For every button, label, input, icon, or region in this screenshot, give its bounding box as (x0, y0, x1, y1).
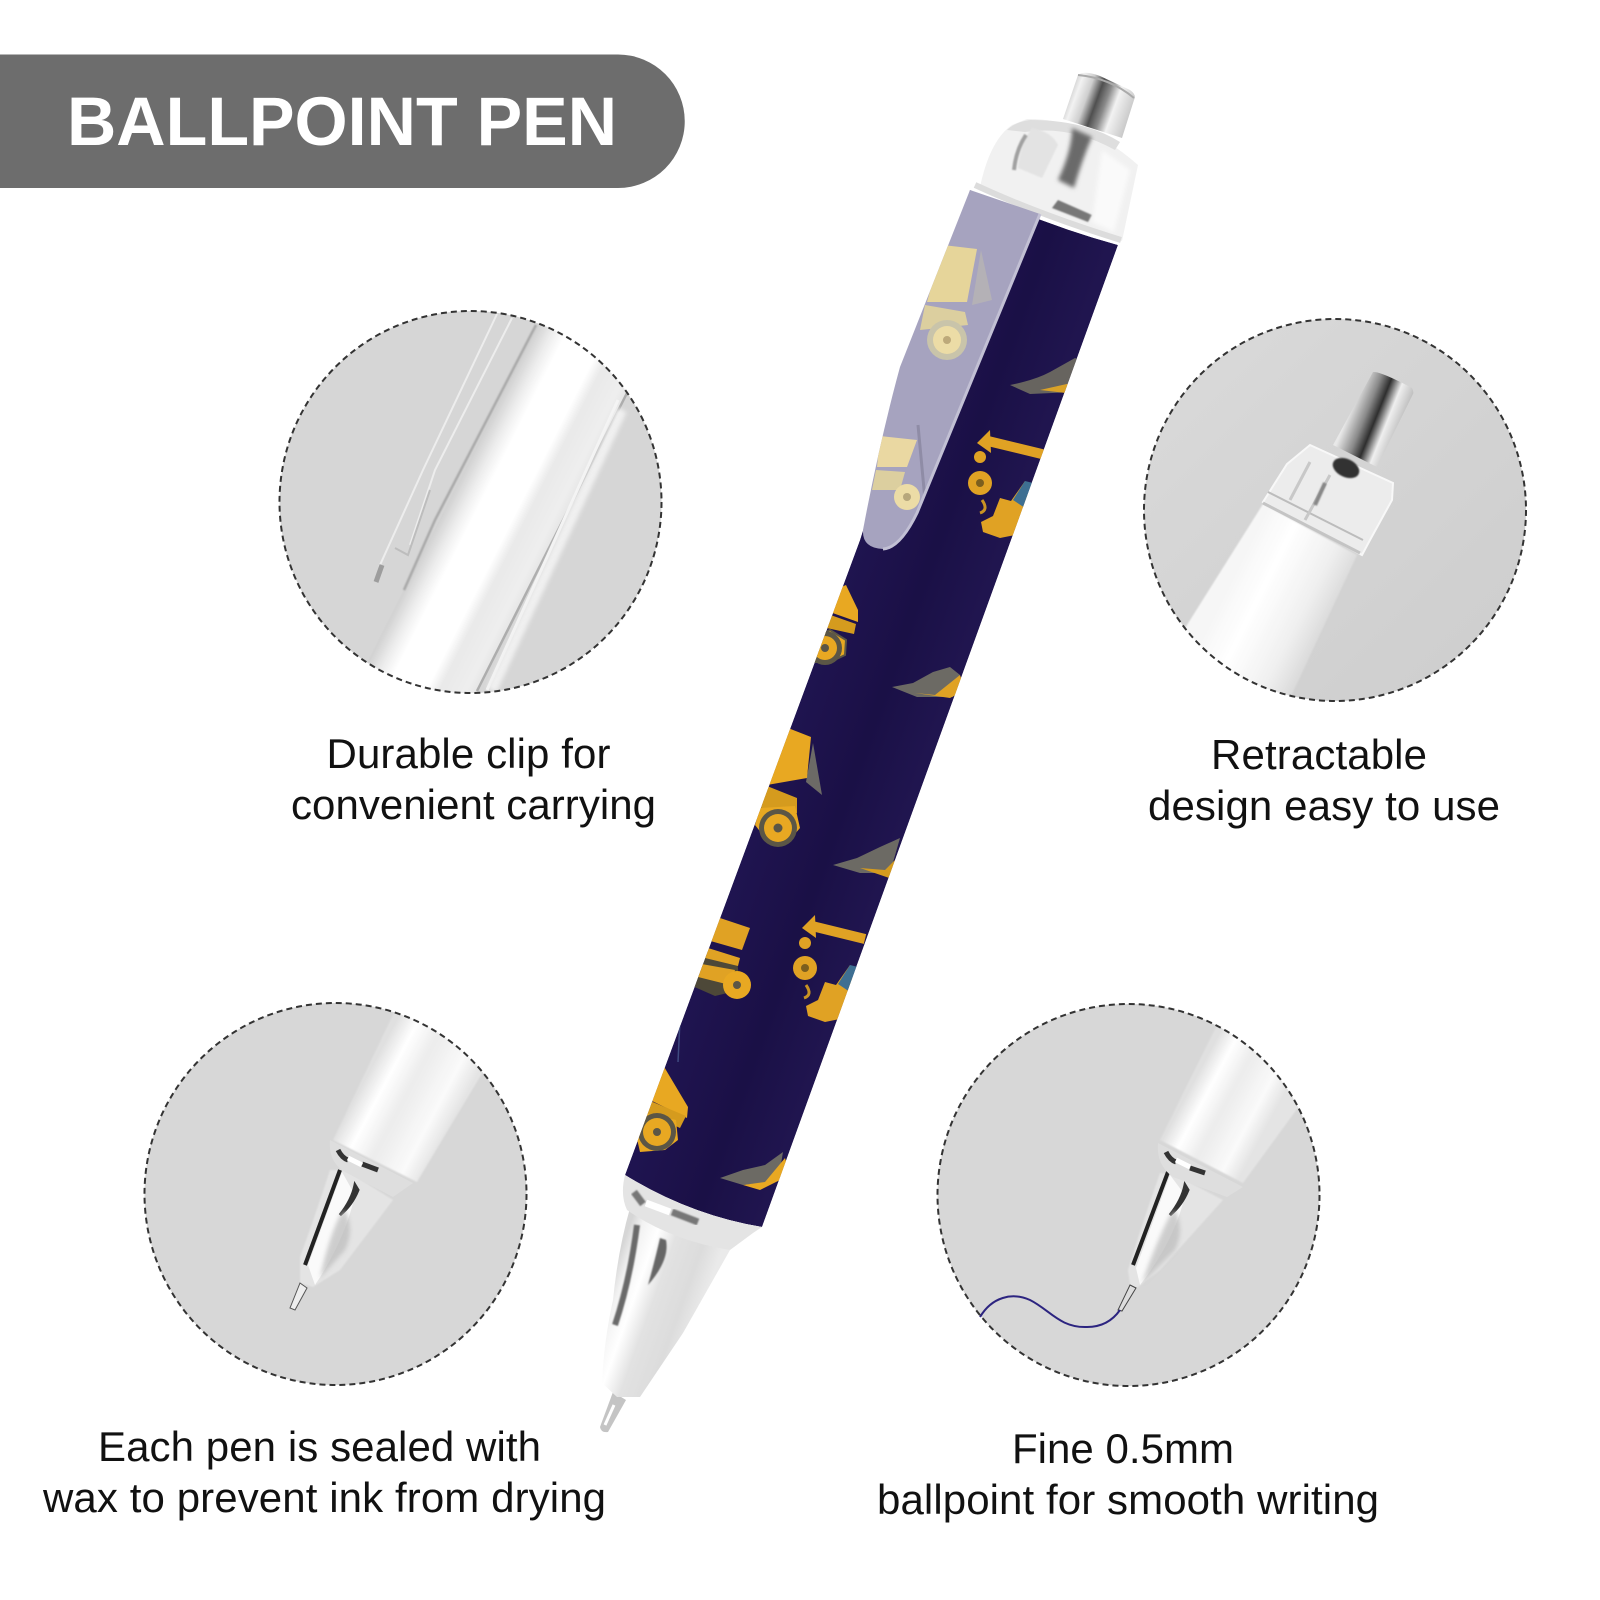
caption: retractable (1148, 731, 1500, 829)
pattern: dirt mound upper (1010, 358, 1077, 394)
pattern: crane lower (793, 915, 865, 1022)
silver nib (600, 1175, 762, 1432)
pattern: road roller (690, 917, 751, 999)
caption: clip: Durable clip for (326, 730, 610, 777)
clear top section (975, 119, 1138, 241)
caption: fine ballpoint (877, 1425, 1379, 1523)
nib close-up with ink (1118, 1015, 1305, 1311)
clip outline close-up (376, 314, 512, 582)
detail: fine point circle (938, 1004, 1320, 1386)
pen push button (1063, 73, 1135, 138)
pattern: dirt mound and bucket (892, 667, 965, 698)
caption: wax seal: wax to prevent ink from drying (42, 1474, 606, 1521)
pattern: dirt mound lower (833, 838, 900, 880)
pattern: dump truck bottom (635, 1020, 688, 1152)
detail: clip circle (278, 310, 662, 694)
caption: retractable: Retractable (1211, 731, 1427, 778)
pen barrel with construction pattern (625, 190, 1118, 1227)
caption: wax seal (42, 1423, 606, 1521)
detail: retractable circle (1144, 319, 1526, 720)
detail: wax sealed nib circle (144, 1000, 526, 1385)
pattern: dump truck top (814, 585, 858, 665)
caption: fine ballpoint: ballpoint for smooth writing (877, 1476, 1379, 1523)
caption: retractable: design easy to use (1148, 782, 1500, 829)
nib close-up (290, 1000, 490, 1310)
caption: fine ballpoint: Fine 0.5mm (1012, 1425, 1234, 1472)
clip reflection: truck (920, 245, 992, 360)
clip reflection: roller (872, 425, 925, 510)
pattern: dump truck middle (755, 728, 822, 847)
caption: clip (291, 730, 656, 828)
caption: wax seal: Each pen is sealed with (98, 1423, 541, 1470)
pattern: crane upper (968, 430, 1050, 538)
title banner (0, 54, 685, 188)
title text: BALLPOINT PEN (67, 83, 617, 160)
main pen illustration (600, 73, 1138, 1432)
ink line (980, 1296, 1120, 1327)
clear barrel close-up (368, 324, 628, 693)
pattern: mound bottom (720, 1152, 790, 1190)
caption: clip: convenient carrying (291, 781, 656, 828)
retractable top close-up (1186, 372, 1414, 695)
translucent pocket clip (863, 190, 1040, 549)
